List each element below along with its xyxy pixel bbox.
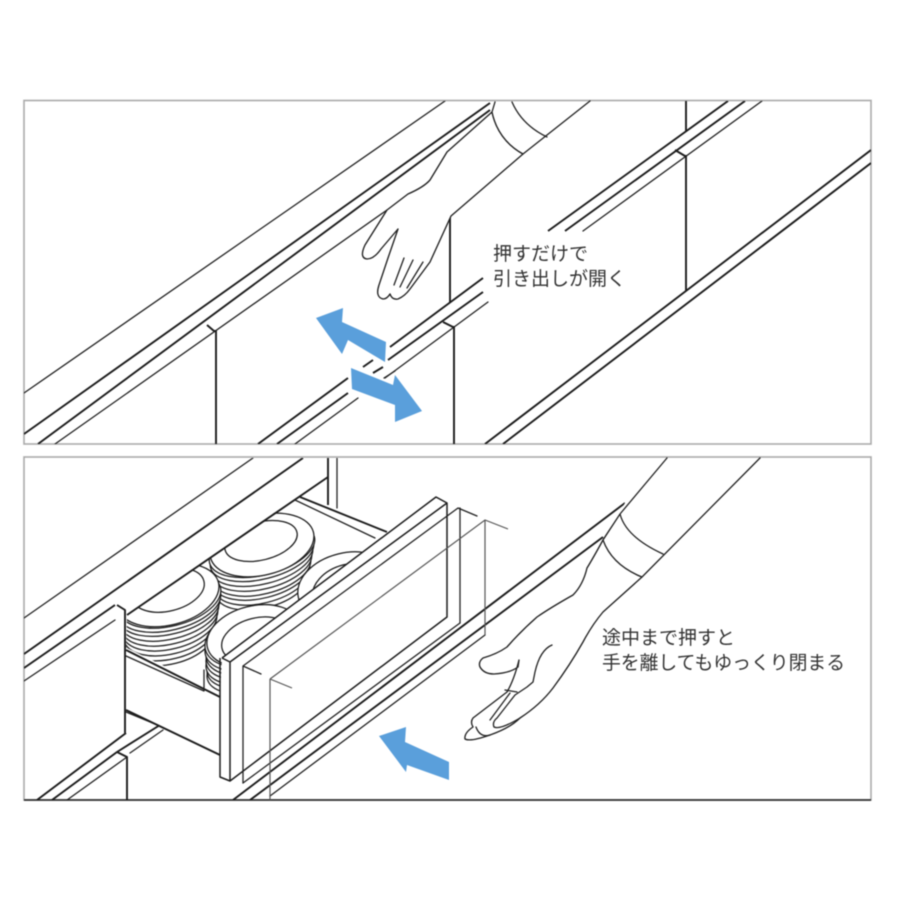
ghost panel: intermediate positions [243, 508, 508, 800]
plate stack: front left [125, 564, 222, 667]
icon: sleeve cuff bottom [603, 458, 760, 577]
arrow: push in [316, 308, 386, 362]
infographic: drawer push-open and soft-close [22, 99, 872, 802]
icon: sleeve cuff top [492, 101, 590, 154]
text: push open caption: 引き出しが開く [493, 268, 626, 290]
cabinet lines: top panel [24, 101, 871, 444]
icon: hand pressing the drawer [362, 112, 523, 299]
plate stack: back [208, 512, 316, 610]
rails: bottom panel [233, 503, 625, 800]
panel: push to open [24, 100, 871, 444]
cabinet lines: bottom panel [24, 458, 387, 800]
text: push open caption: 押すだけで [493, 243, 588, 265]
plate stack: back right [296, 550, 362, 600]
text: soft close caption: 途中まで押すと [602, 627, 735, 649]
text: push open caption [493, 243, 626, 290]
open drawer front [220, 497, 447, 781]
arrow: pop out [351, 368, 422, 422]
text: soft close caption: 手を離してもゆっくり閉まる [602, 652, 845, 674]
panel frame: bottom [24, 457, 871, 800]
drawer back edge over plates [127, 477, 328, 615]
panel: soft close [24, 457, 871, 800]
panel frame: top [24, 100, 871, 444]
icon: releasing hand [465, 514, 642, 740]
plate stack: front right [204, 603, 287, 692]
drawer side wall [125, 647, 220, 755]
closed drawer front [117, 605, 125, 733]
text: soft close caption [602, 627, 845, 674]
arrow: closing direction [379, 727, 449, 780]
